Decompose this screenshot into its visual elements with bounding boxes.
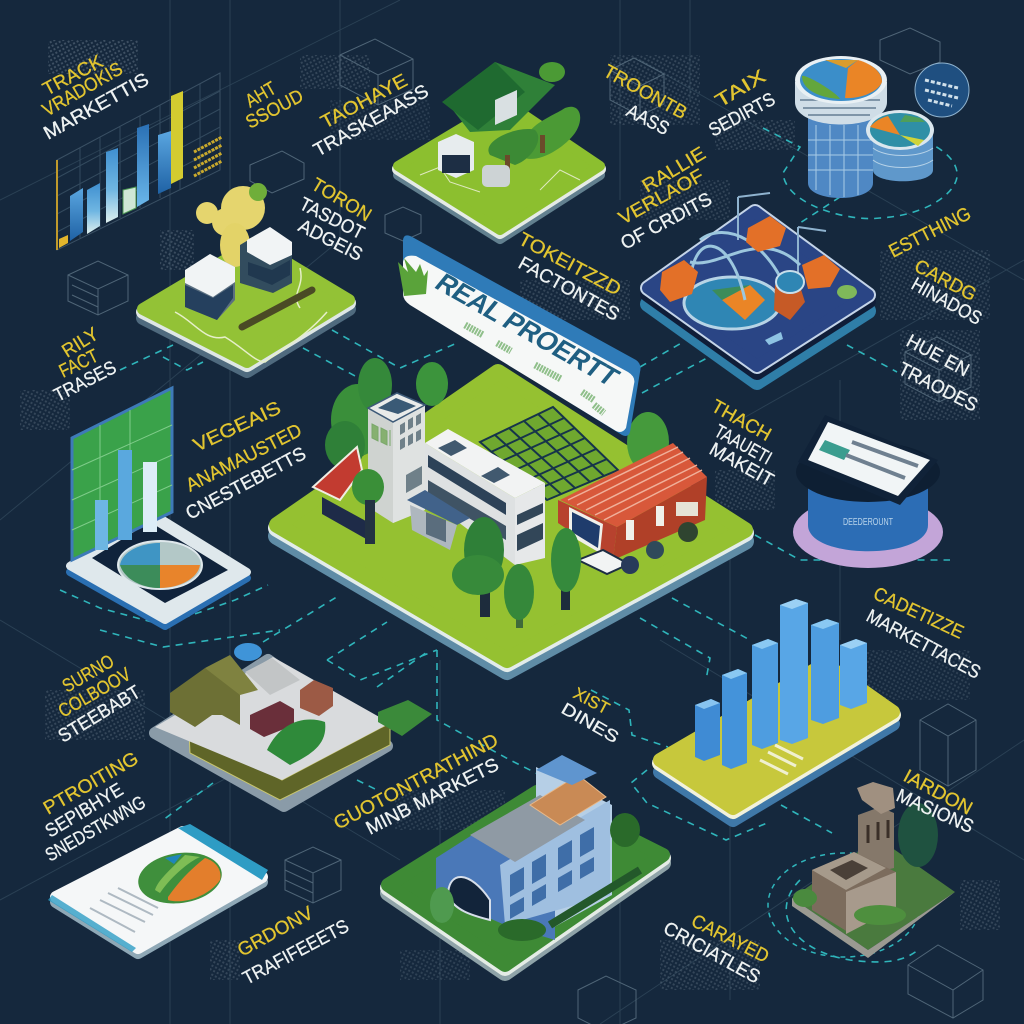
tall tower building — [368, 393, 425, 523]
trees behind buildings — [325, 358, 669, 472]
label: taohaye traskeaass: TAOHAYE — [317, 70, 411, 133]
blue building — [436, 755, 612, 940]
cylinder caption: DEEDEROUNT — [843, 517, 893, 528]
label: cadetizze marketaces: CADETIZZE — [870, 583, 967, 644]
label: rallie verlaof of credits: RALLIE — [639, 143, 710, 197]
label: estthing cardg hinados: HINADOS — [908, 274, 985, 330]
label: vegeais anamausted cnestebetts: VEGEAIS — [190, 398, 284, 457]
label: rily facit trases: TRASES — [51, 357, 120, 406]
label: thach taaueti makeit — [706, 396, 777, 491]
small red house — [313, 447, 384, 544]
label: hue en traodes — [895, 331, 981, 416]
label: toron tasdot adgeis — [295, 174, 375, 266]
label: xist dines: XIST — [570, 684, 613, 718]
panel: real property banner — [398, 235, 640, 436]
panel: top farm platform — [398, 62, 600, 239]
label: cadetizze marketaces: MARKETTACES — [863, 606, 984, 684]
panel: central property platform — [277, 358, 745, 671]
label: ptroiting sepibhye snedstkwng: SNEDSTKWNG — [42, 792, 149, 866]
label: iardon masions: IARDON — [900, 766, 976, 820]
crop field grid — [480, 407, 618, 500]
red warehouse — [558, 443, 707, 574]
panel: left campus platform — [155, 643, 432, 806]
label: track markets: TRACK — [39, 51, 107, 100]
label: aht ssoud: SSOUD — [242, 86, 307, 133]
label: ptroiting sepibhye snedstkwng — [40, 748, 149, 866]
front trees — [452, 517, 581, 628]
label: aht ssoud: AHT — [242, 78, 281, 112]
label: rily facit trases: FACT — [56, 346, 102, 382]
connector lines — [60, 128, 957, 962]
label: tokenized factontes: TOKEITZZD — [515, 229, 624, 300]
label: taix sedirts: TAIX — [712, 66, 770, 112]
main office building — [407, 429, 545, 565]
label: surno colboov steebabt: STEEBABT — [55, 682, 145, 747]
label: thach taaueti makeit: THACH — [708, 396, 775, 446]
label: cadetizze marketaces — [863, 583, 984, 684]
panel: right tablet on cylinder — [793, 415, 943, 568]
label: surno colboov steebabt: COLBOOV — [55, 664, 135, 722]
label: ptroiting sepibhye snedstkwng: PTROITING — [40, 748, 142, 819]
label: carayed criciatles: CRICIATLES — [660, 918, 763, 988]
panel: bottom left tablet pie — [48, 824, 268, 953]
label: rily facit trases — [51, 324, 120, 406]
label: rallie verlaof of credits: VERLAOF — [615, 165, 708, 229]
label: vegeais anamausted cnestebetts: CNESTEBETTS — [182, 443, 310, 524]
label: toron tasdot adgeis: TASDOT — [296, 194, 368, 244]
label: carayed criciatles: CARAYED — [688, 911, 772, 968]
panel: bottom right tower ruin — [768, 782, 955, 958]
label: track markets: MARKETTIS — [40, 69, 153, 144]
banner title: REAL PROERTT — [429, 268, 626, 392]
label: iardon masions: MASIONS — [893, 785, 976, 838]
panel: left factory platform — [143, 183, 349, 371]
label: estthing cardg hinados — [886, 203, 985, 330]
label: hue en traodes: TRAODES — [895, 359, 981, 416]
label: grdonv trafifeeets: GRDONV — [234, 903, 317, 961]
label: thach taaueti makeit: TAAUETI — [711, 421, 775, 469]
panel: top-left bar chart — [57, 73, 222, 250]
label: rily facit trases: RILY — [59, 324, 103, 362]
label: ptroiting sepibhye snedstkwng: SEPIBHYE — [42, 779, 127, 842]
label: troontb aass: TROONTB — [600, 61, 690, 124]
panel: left dashboard tablet — [70, 388, 247, 626]
label: taohaye traskeaass: TRASKEAASS — [310, 81, 432, 161]
label: thach taaueti makeit: MAKEIT — [706, 439, 777, 491]
banner grass — [398, 258, 428, 296]
panel: top-right coin stacks — [795, 56, 969, 198]
label: rallie verlaof of credits — [615, 143, 716, 254]
label: track markets: VRADOKIS — [39, 59, 127, 121]
panel: right blue platform with pipes — [648, 193, 868, 382]
label: toron tasdot adgeis: TORON — [307, 174, 375, 226]
label: vegeais anamausted cnestebetts — [182, 398, 310, 524]
label: guotontrathind minb markets: MINB MARKETS — [363, 754, 502, 839]
label: surno colboov steebabt — [55, 651, 145, 747]
label: xist dines: DINES — [558, 699, 622, 747]
label: taix sedirts: SEDIRTS — [705, 89, 779, 141]
label: iardon masions — [893, 766, 976, 838]
label: surno colboov steebabt: SURNO — [59, 651, 118, 697]
label: troontb aass: AASS — [623, 101, 672, 140]
label: xist dines — [558, 684, 622, 747]
label: hue en traodes: HUE EN — [903, 331, 973, 381]
label: toron tasdot adgeis: ADGEIS — [295, 216, 366, 266]
label: tokenized factontes: FACTONTES — [515, 253, 623, 326]
label: estthing cardg hinados: CARDG — [911, 256, 980, 306]
label: guotontrathind minb markets: GUOTONTRATHIND — [330, 730, 502, 834]
panel: bottom green building platform — [388, 755, 663, 973]
label: grdonv trafifeeets: TRAFIFEEETS — [239, 916, 353, 989]
label: estthing cardg hinados: ESTTHING — [886, 203, 975, 262]
label: rallie verlaof of credits: OF CRDITS — [617, 189, 716, 254]
label: vegeais anamausted cnestebetts: ANAMAUSTED — [183, 420, 305, 496]
panel: right bar chart platform — [660, 599, 893, 820]
label: taix sedirts — [705, 66, 779, 141]
